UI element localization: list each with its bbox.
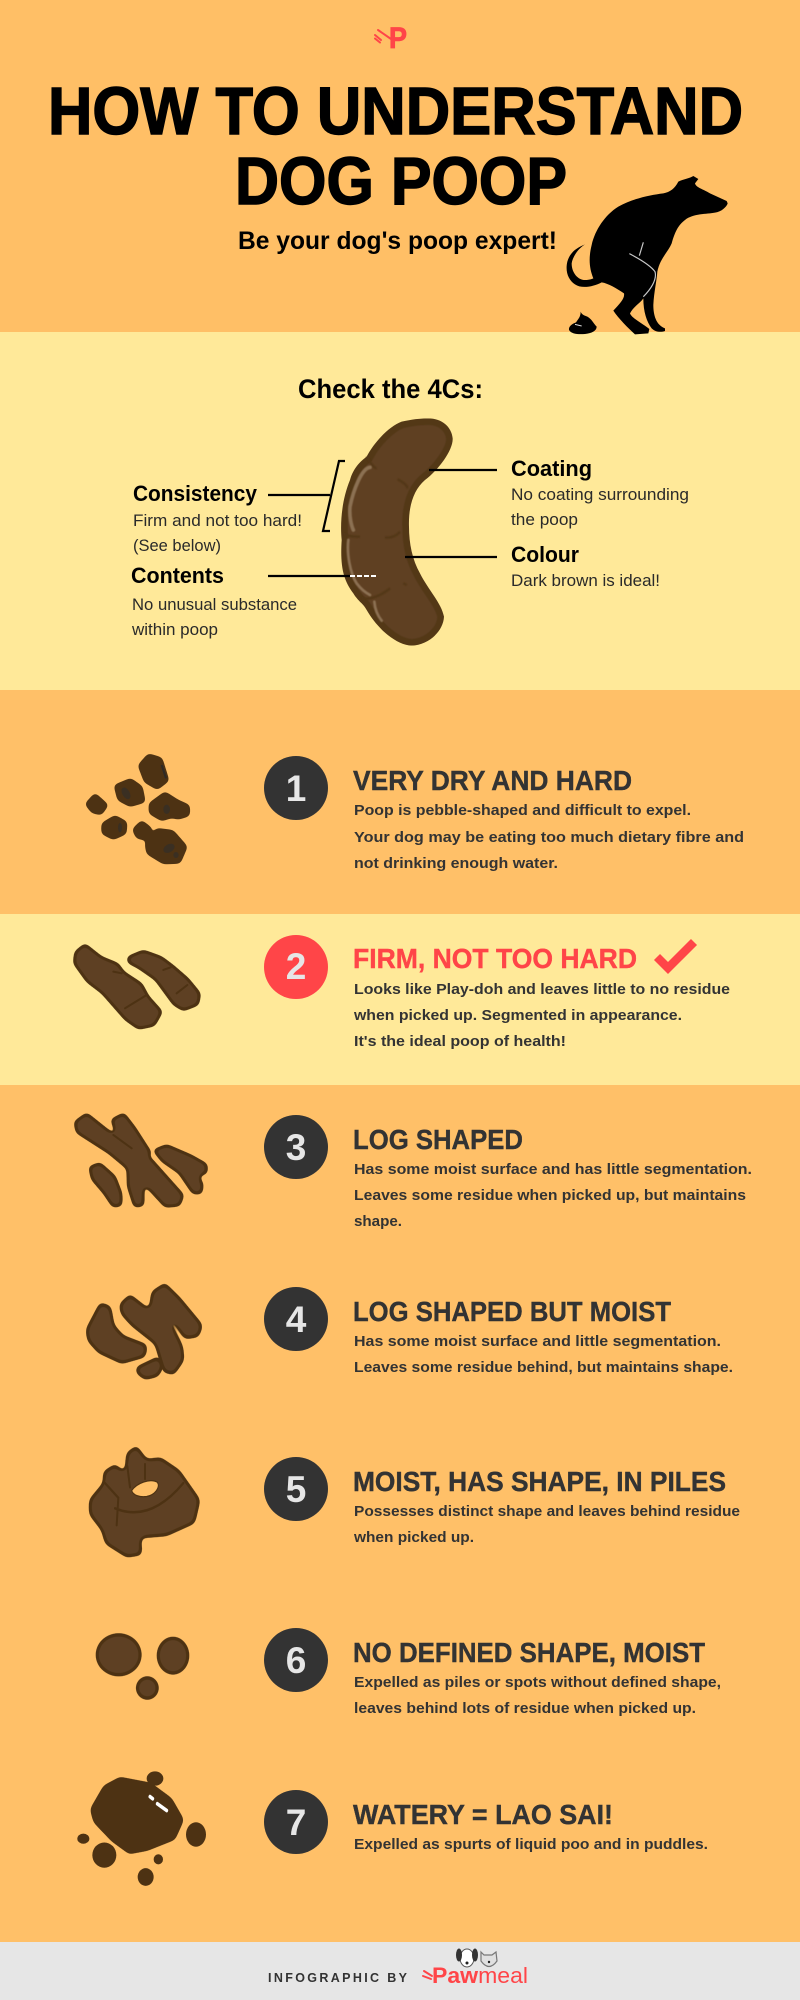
icon: Pawmeal P logo: P bbox=[389, 22, 407, 55]
row 5: moist, has shape, in piles bbox=[89, 1446, 740, 1557]
callout: consistency: Consistency bbox=[133, 481, 258, 506]
number badge 6 bbox=[264, 1628, 328, 1692]
footer credit: INFOGRAPHIC BY bbox=[268, 1971, 408, 1985]
description bbox=[354, 1334, 733, 1376]
icon: Pawmeal P logo bbox=[375, 22, 407, 55]
heading: WATERY = LAO SAI! bbox=[353, 1799, 613, 1830]
callout: coating: No coating surrounding bbox=[511, 485, 689, 504]
callout: consistency: (See below) bbox=[133, 536, 221, 555]
number badge 3 bbox=[264, 1115, 328, 1179]
heading: NO DEFINED SHAPE, MOIST bbox=[353, 1637, 705, 1668]
callout: colour: Colour bbox=[511, 542, 579, 567]
row 1: very dry and hard bbox=[85, 754, 744, 872]
description bbox=[353, 982, 730, 1050]
description: Possesses distinct shape and leaves behind residue bbox=[354, 1504, 740, 1520]
panel: stool chart background bbox=[0, 690, 800, 1942]
panel: highlighted row background bbox=[0, 914, 800, 1085]
description bbox=[354, 803, 744, 872]
number badge 2 bbox=[264, 935, 328, 999]
description: Expelled as piles or spots without defined shape, bbox=[354, 1675, 721, 1691]
heading: VERY DRY AND HARD bbox=[353, 765, 632, 796]
panel: footer background bbox=[0, 1942, 800, 2000]
number badge 4: 4 bbox=[286, 1299, 307, 1340]
number badge 7: 7 bbox=[286, 1802, 306, 1843]
icon: moist log poops bbox=[86, 1283, 203, 1380]
row 6: no defined shape, moist bbox=[96, 1628, 721, 1717]
illustration: large poop bbox=[341, 418, 453, 646]
description: when picked up. Segmented in appearance. bbox=[353, 1008, 682, 1024]
description: Expelled as spurts of liquid poo and in puddles. bbox=[354, 1837, 708, 1853]
description: shape. bbox=[354, 1214, 402, 1230]
row 2: firm, not too hard bbox=[73, 935, 730, 1050]
icon: check mark bbox=[657, 942, 694, 968]
row 3: log shaped bbox=[74, 1113, 752, 1230]
icon: dog face bbox=[456, 1948, 478, 1967]
panel: 4Cs background bbox=[0, 332, 800, 690]
callout: colour bbox=[405, 542, 660, 590]
number badge 3: 3 bbox=[286, 1127, 306, 1168]
callout: colour: Dark brown is ideal! bbox=[511, 571, 660, 590]
icon: segmented poop bbox=[73, 943, 201, 1029]
callout: consistency: Firm and not too hard! bbox=[133, 511, 302, 530]
heading: Check the 4Cs: Check the 4Cs: bbox=[298, 374, 483, 404]
description: leaves behind lots of residue when picked up. bbox=[354, 1701, 696, 1717]
callout: contents: No unusual substance bbox=[132, 595, 297, 614]
title: DOG POOP bbox=[235, 144, 567, 219]
number badge 2: 2 bbox=[286, 946, 306, 987]
heading: MOIST, HAS SHAPE, IN PILES bbox=[353, 1466, 726, 1497]
row 4: log shaped but moist bbox=[86, 1283, 733, 1380]
number badge 1 bbox=[264, 756, 328, 820]
description bbox=[353, 1504, 740, 1546]
callout: coating: the poop bbox=[511, 510, 578, 529]
number badge 1: 1 bbox=[286, 768, 306, 809]
description: not drinking enough water. bbox=[354, 856, 558, 872]
description bbox=[354, 1675, 721, 1717]
icon: shapeless poop spots bbox=[96, 1634, 189, 1699]
callout: coating: Coating bbox=[511, 456, 592, 481]
description: Has some moist surface and little segmentation. bbox=[354, 1334, 721, 1350]
description: Looks like Play-doh and leaves little to no residue bbox=[354, 982, 730, 998]
heading: FIRM, NOT TOO HARD bbox=[353, 943, 637, 974]
callout: contents bbox=[131, 563, 378, 639]
subtitle: Be your dog's poop expert! bbox=[238, 227, 557, 255]
callout: consistency bbox=[133, 461, 345, 555]
description: Poop is pebble-shaped and difficult to expel. bbox=[354, 803, 691, 819]
icon: pebble poop bbox=[85, 754, 189, 864]
callout: coating bbox=[429, 456, 689, 529]
row 7: watery bbox=[77, 1771, 708, 1886]
icon: log poops bbox=[74, 1113, 207, 1207]
description: It's the ideal poop of health! bbox=[354, 1034, 566, 1050]
number badge 5 bbox=[264, 1457, 328, 1521]
icon: piled poop bbox=[89, 1446, 200, 1557]
number badge 6: 6 bbox=[286, 1640, 306, 1681]
icon: cat face bbox=[481, 1952, 497, 1966]
description bbox=[354, 1162, 752, 1230]
title bbox=[48, 74, 743, 219]
icon: watery puddle bbox=[77, 1771, 206, 1886]
icon: squatting dog silhouette bbox=[567, 176, 728, 334]
heading: LOG SHAPED BUT MOIST bbox=[353, 1296, 671, 1327]
callout: contents: within poop bbox=[131, 620, 218, 639]
title: HOW TO UNDERSTAND bbox=[48, 74, 743, 149]
description: Leaves some residue when picked up, but maintains bbox=[354, 1188, 746, 1204]
icon: small poop pile bbox=[569, 312, 597, 334]
logo: Pawmeal: Pawmeal bbox=[432, 1963, 528, 1988]
description: Leaves some residue behind, but maintains shape. bbox=[354, 1360, 733, 1376]
description: Your dog may be eating too much dietary fibre and bbox=[354, 830, 744, 846]
description: when picked up. bbox=[353, 1530, 474, 1546]
callout: contents: Contents bbox=[131, 563, 224, 588]
number badge 7 bbox=[264, 1790, 328, 1854]
number badge 4 bbox=[264, 1287, 328, 1351]
panel: header background bbox=[0, 0, 800, 332]
number badge 5: 5 bbox=[286, 1469, 306, 1510]
heading: LOG SHAPED bbox=[353, 1124, 523, 1155]
description: Has some moist surface and has little segmentation. bbox=[354, 1162, 752, 1178]
